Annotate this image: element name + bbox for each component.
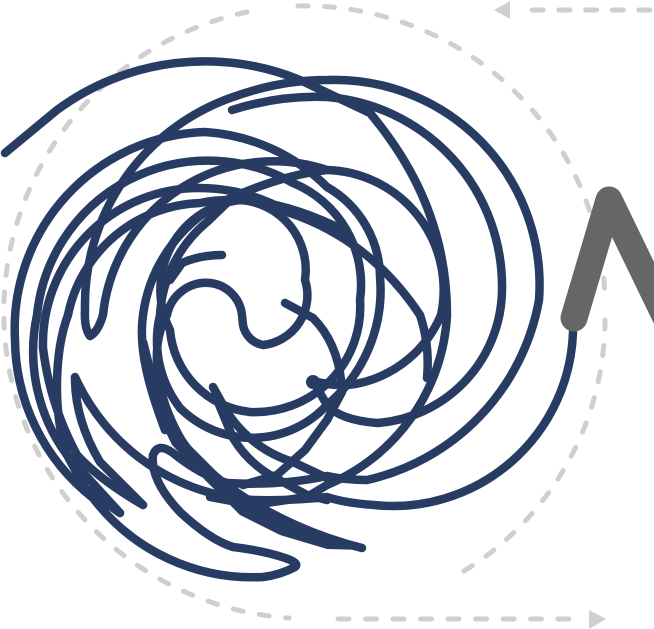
bottom arrowhead	[589, 610, 606, 629]
gray caret chevron	[574, 200, 654, 330]
top arrowhead	[494, 1, 510, 19]
navy scribble spiral	[5, 61, 573, 577]
